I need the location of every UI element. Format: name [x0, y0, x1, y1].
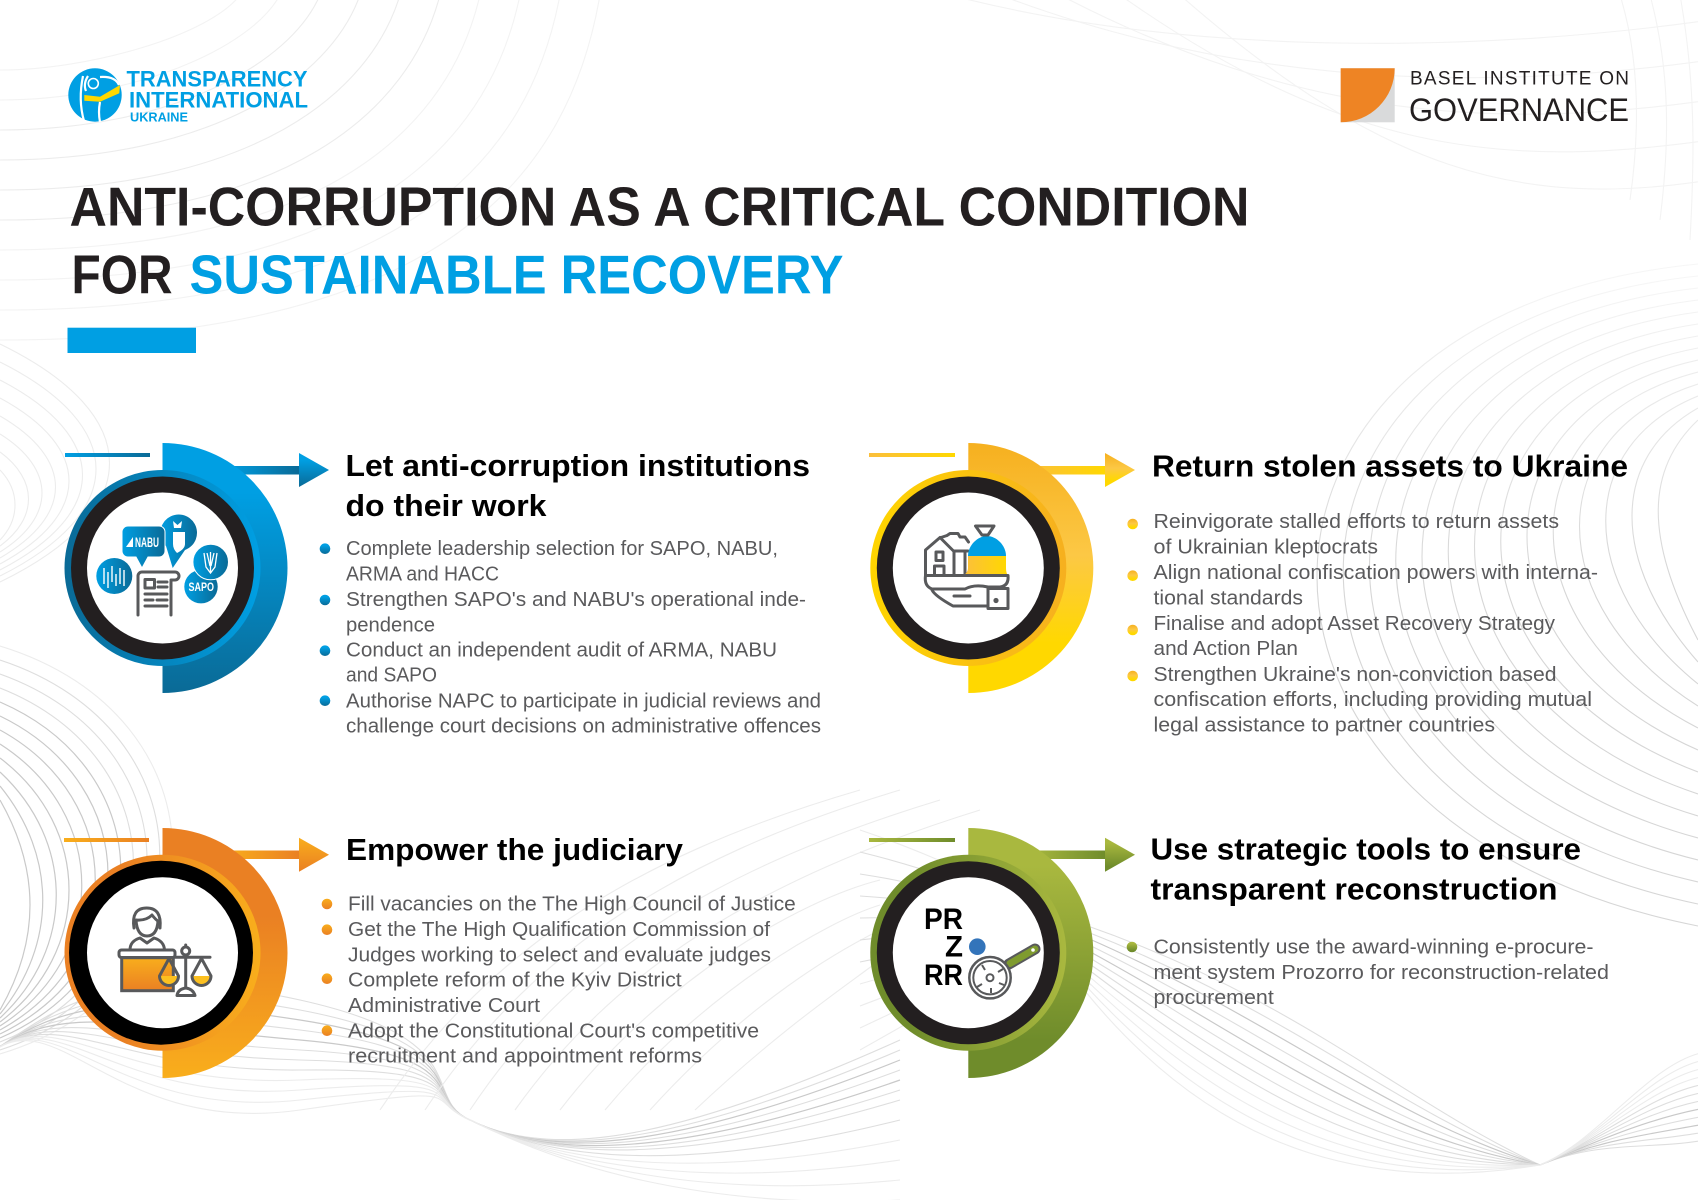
title: SUSTAINABLE RECOVERY: [190, 243, 844, 305]
bullet list: ARMA and HACC: [346, 563, 499, 585]
bullet list: [1127, 936, 1609, 1009]
logo: Transparency International Ukraine: INTERNATIONAL: [129, 88, 308, 113]
bullet list: tional standards: [1154, 588, 1303, 610]
icon: house and money bag on a hand: [925, 526, 1008, 608]
bullet list: [320, 538, 821, 738]
bullet list: of Ukrainian kleptocrats: [1154, 536, 1378, 558]
heading: [1150, 831, 1581, 906]
bullet list: Authorise NAPC to participate in judicial reviews and: [346, 690, 821, 712]
accent line: [64, 838, 149, 842]
logo: Transparency International Ukraine: TRANSPARENCY: [126, 67, 308, 92]
accent line: [65, 453, 150, 457]
icon: Prozorro wordmark and magnifier: PR: [924, 903, 963, 936]
bullet list: Complete reform of the Kyiv District: [348, 970, 682, 992]
heading: do their work: [346, 488, 547, 523]
heading: Let anti-corruption institutions: [346, 448, 810, 483]
panel: return stolen assets to Ukraine: [869, 443, 1628, 737]
heading: Empower the judiciary: [346, 832, 684, 867]
logo: Basel Institute on Governance: BASEL INSTITUTE ON: [1410, 68, 1629, 89]
icon: Prozorro wordmark and magnifier: Z: [945, 931, 963, 964]
bullet list: challenge court decisions on administrative offences: [346, 716, 821, 738]
bullet list: Complete leadership selection for SAPO, NABU,: [346, 538, 778, 560]
panel: let anti-corruption institutions do their work: [64, 443, 821, 738]
icon: TI globe: [68, 68, 122, 122]
icon: Prozorro wordmark and magnifier: RR: [924, 959, 963, 992]
heading: Return stolen assets to Ukraine: [1152, 449, 1628, 484]
icon: Basel square: [1341, 68, 1395, 122]
badge: orange circle with judge icon: [64, 828, 329, 1078]
badge: blue circle with institutions icon: [64, 443, 329, 693]
panel: empower the judiciary: [64, 828, 796, 1078]
bullet list: procurement: [1154, 987, 1274, 1009]
bullet list: [1127, 511, 1598, 737]
logo: Basel Institute on Governance: [1341, 68, 1629, 128]
title accent bar: [68, 328, 196, 353]
arrow: [1030, 838, 1135, 872]
bullet list: Judges working to select and evaluate judges: [348, 944, 771, 966]
bullet list: Strengthen Ukraine's non-conviction based: [1154, 664, 1556, 686]
bullet list: Adopt the Constitutional Court's competitive: [348, 1020, 759, 1042]
bullet list: [322, 894, 796, 1068]
arrow: [225, 453, 329, 487]
bullet list: Reinvigorate stalled efforts to return assets: [1154, 511, 1559, 533]
bullet list: confiscation efforts, including providing mutual: [1154, 689, 1592, 711]
accent line: [869, 453, 955, 457]
bullet list: pendence: [346, 614, 435, 636]
title: ANTI-CORRUPTION AS A CRITICAL CONDITION: [70, 176, 1250, 238]
bullet list: Fill vacancies on the The High Council of Justice: [348, 894, 796, 916]
logo: Transparency International Ukraine: [68, 67, 308, 124]
arrow: [225, 838, 329, 872]
bullet list: and Action Plan: [1154, 638, 1298, 660]
icon: judge at bench with scales: [119, 908, 211, 996]
bullet list: ment system Prozorro for reconstruction-related: [1154, 962, 1609, 984]
bullet list: Conduct an independent audit of ARMA, NABU: [346, 640, 777, 662]
arrow: [1030, 453, 1135, 487]
bullet list: Strengthen SAPO's and NABU's operational inde-: [346, 589, 806, 611]
title: FOR: [72, 243, 172, 305]
bullet list: Administrative Court: [348, 995, 540, 1017]
icon: institutions speech bubbles and document: NABU: [135, 535, 159, 550]
bullet list: Get the The High Qualification Commission of: [348, 919, 770, 941]
icon: Prozorro wordmark and magnifier: [924, 903, 1035, 998]
logo: Basel Institute on Governance: GOVERNANCE: [1409, 92, 1629, 128]
badge: green circle with Prozorro icon: [869, 828, 1135, 1078]
icon: institutions speech bubbles and document: SAPO: [188, 582, 214, 594]
bullet list: legal assistance to partner countries: [1154, 715, 1495, 737]
badge: yellow circle with assets icon: [869, 443, 1135, 693]
bullet list: Finalise and adopt Asset Recovery Strategy: [1154, 613, 1555, 635]
heading: [346, 448, 810, 523]
heading: Use strategic tools to ensure: [1150, 831, 1581, 866]
title: [70, 176, 1250, 305]
accent line: [869, 838, 955, 842]
bullet list: recruitment and appointment reforms: [348, 1046, 702, 1068]
logo: Transparency International Ukraine: UKRAINE: [130, 110, 188, 124]
bullet list: Align national confiscation powers with interna-: [1154, 562, 1598, 584]
bullet list: Consistently use the award-winning e-procure-: [1154, 936, 1594, 958]
bullet list: and SAPO: [346, 665, 437, 687]
icon: institutions speech bubbles and document: [96, 515, 228, 615]
heading: transparent reconstruction: [1150, 871, 1558, 906]
panel: use strategic tools to ensure transparent reconstruction: [869, 828, 1609, 1078]
